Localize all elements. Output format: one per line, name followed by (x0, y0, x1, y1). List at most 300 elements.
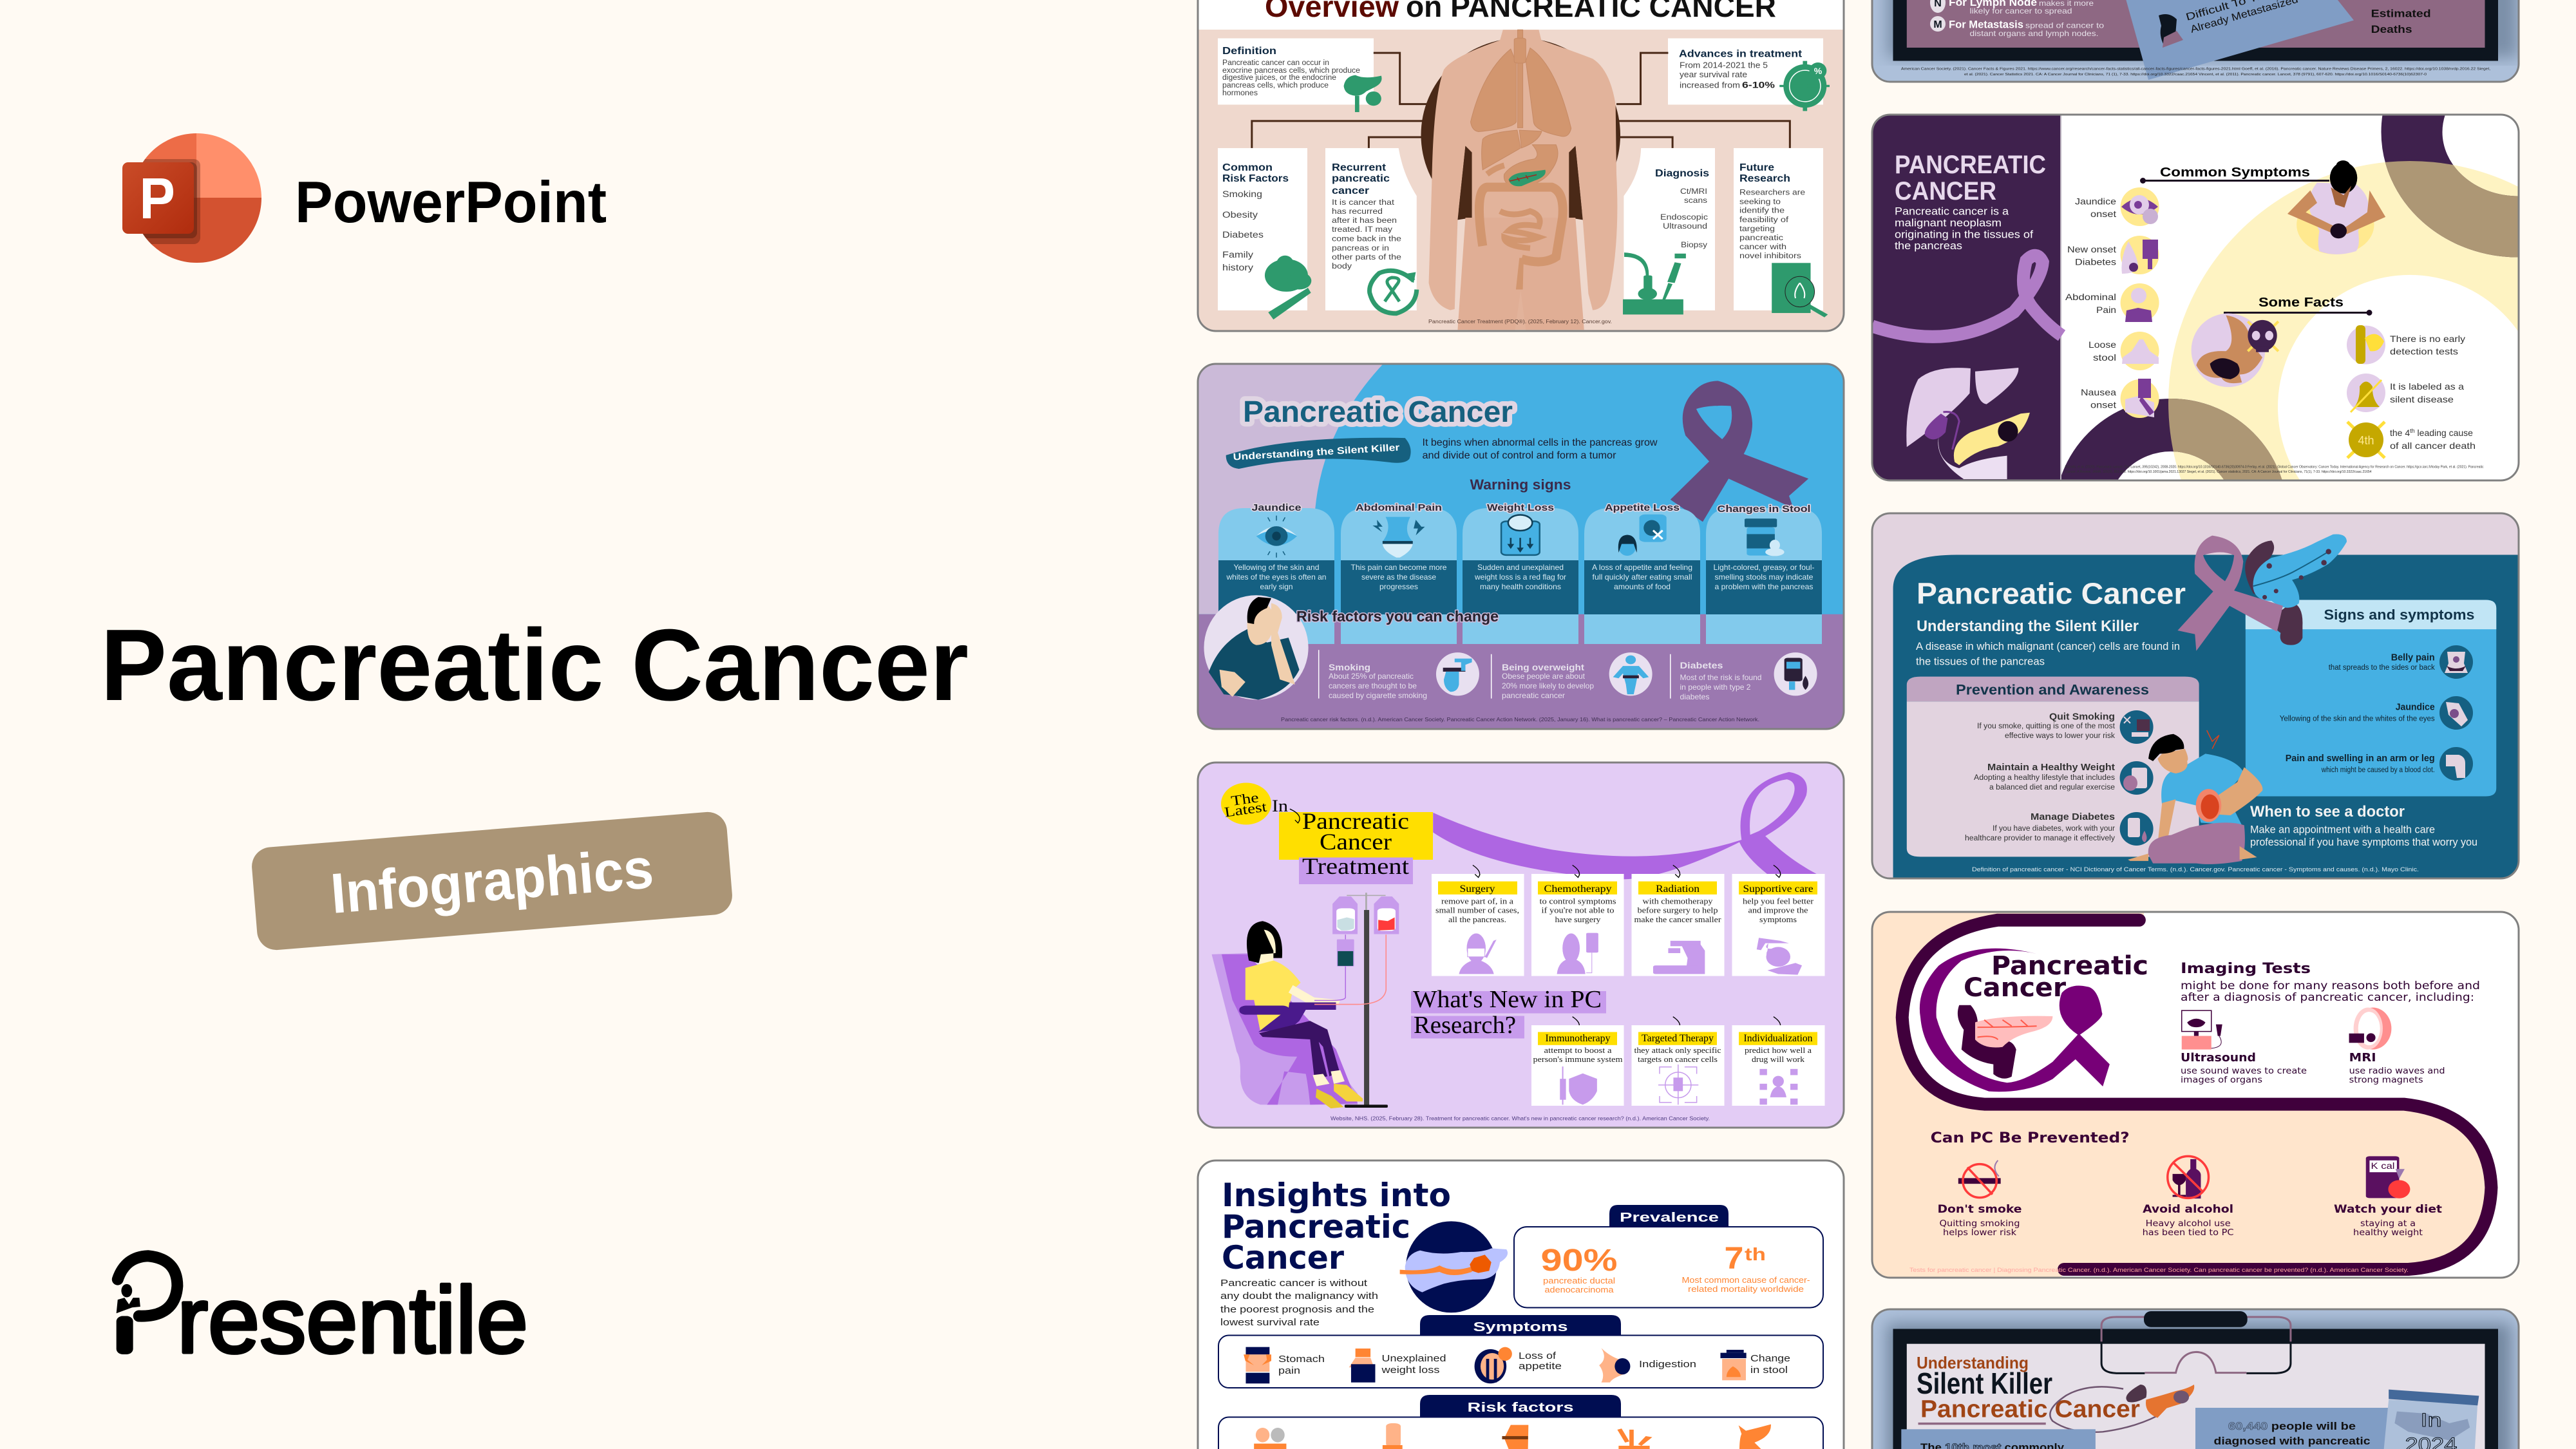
main title: Pancreatic Cancer (100, 609, 969, 722)
prevention labels: healthcare provider to manage it effectively (1965, 835, 2115, 842)
risk factor text: cancers are thought to be (1329, 681, 1417, 690)
symptom labels (2065, 196, 2116, 410)
sign labels: Jaundice (2396, 702, 2435, 713)
risk factor text: About 25% of pancreatic (1329, 672, 1414, 681)
ribbon border (1902, 920, 2491, 1269)
text block: recurrent pancreatic cancer (1332, 162, 1401, 270)
research headings: Individualization (1744, 1033, 1812, 1044)
text block: common risk factors: Smoking (1222, 189, 1262, 199)
badge: The Latest In: In (1272, 797, 1288, 815)
text block: recurrent pancreatic cancer: treated. IT may (1332, 225, 1393, 234)
prevention labels: If you smoke, quitting is one of the most (1977, 723, 2116, 730)
symptom icons (2121, 187, 2159, 418)
text block: advances in treatment: year survival rate (1680, 70, 1747, 79)
treatment descriptions: help you feel better (1743, 896, 1814, 905)
text block: diagnosis: Biopsy (1681, 240, 1708, 249)
text block: definition: pancreas cells, which produce (1222, 82, 1329, 90)
estimated deaths label: Estimated (2371, 8, 2431, 20)
intro text (1422, 437, 1658, 461)
title: Pancreatic Cancer (1916, 577, 2186, 668)
panel: clipboard staging (cropped at top) (1872, 0, 2519, 82)
intro text: the poorest prognosis and the (1220, 1305, 1374, 1315)
symptom labels: Change (1750, 1353, 1790, 1364)
icon: research magnifier (1772, 263, 1828, 317)
text block: ultrasound and MRI: use radio waves and (2349, 1066, 2445, 1076)
text block: future research: feasibility of (1739, 215, 1789, 224)
research descriptions: drug will work (1752, 1054, 1805, 1064)
treatment descriptions: and improve the (1748, 905, 1808, 915)
card text: whites of the eyes is often an (1226, 573, 1327, 582)
text block: recurrent pancreatic cancer: after it has been (1332, 216, 1397, 225)
card heads: Changes in Stool (1717, 504, 1811, 515)
card text: many health conditions (1480, 582, 1561, 591)
text block: definition: Pancreatic cancer can occur in (1222, 59, 1329, 67)
card text: progresses (1379, 582, 1418, 591)
symptom labels (1278, 1350, 1790, 1376)
stat: 7th (1682, 1242, 1810, 1294)
title: Overview on Pancreatic Cancer (1266, 0, 1776, 17)
text block: common risk factors: Common (1222, 162, 1273, 173)
icon: cigarette and smoke (1265, 256, 1311, 319)
research descriptions: predict how well a (1745, 1045, 1812, 1055)
symptom labels: Abdominal (2065, 292, 2116, 302)
title: Pancreatic Cancer Treatment: Pancreatic (1302, 808, 1409, 834)
text block: when to see a doctor: professional if you have symptoms that worry you (2250, 837, 2477, 848)
illustration: ribbon and pancreas (1920, 949, 2110, 1092)
stat: 7th: 7 (1725, 1242, 1744, 1276)
treatment headings: Chemotherapy (1544, 884, 1611, 895)
treatment cards (1290, 809, 1825, 1029)
panel: Latest in Pancreatic Cancer Treatment (1198, 762, 1844, 1128)
fact text: It is labeled as a (2390, 381, 2464, 392)
symptom labels: weight loss (1381, 1365, 1440, 1376)
treatment descriptions: make the cancer smaller (1634, 914, 1721, 924)
risk factor text: 20% more likely to develop (1502, 681, 1594, 690)
white info boxes (1218, 39, 1823, 310)
risk factor icons (1254, 1423, 1771, 1449)
text block: recurrent pancreatic cancer: pancreas or in (1332, 243, 1389, 252)
text block: common risk factors (1222, 162, 1289, 272)
title: Insights into Pancreatic Cancer: Pancreatic (1222, 1208, 1410, 1245)
card text: This pain can become more (1351, 563, 1447, 572)
treatment descriptions: symptoms (1759, 914, 1797, 924)
prevention icons (2120, 710, 2154, 846)
title: Pancreatic Cancer: Understanding the Silent Killer (1917, 618, 2139, 635)
illustration: stomach with skull (2192, 314, 2278, 387)
symptom labels: in stool (1750, 1365, 1788, 1376)
stat: 7th: th (1745, 1244, 1766, 1264)
symptom labels: Unexplained (1382, 1353, 1446, 1364)
prevention labels: If you have diabetes, work with your (1993, 825, 2115, 833)
title: Pancreatic Cancer: A disease in which malignant (cancer) cells are found in (1916, 641, 2180, 652)
fact text: th (2410, 428, 2415, 434)
symptom labels: New onset (2067, 244, 2116, 254)
title: Pancreatic Cancer: Cancer (1964, 973, 2066, 1003)
sidebar title (1895, 151, 2046, 205)
icon: recurrence ribbon (1370, 270, 1417, 314)
sidebar (1872, 115, 2062, 480)
card text: a problem with the pancreas (1714, 582, 1814, 591)
text block: diagnosis: Endoscopic (1660, 213, 1708, 222)
staging text: For Metastasis (1949, 19, 2023, 31)
treatment descriptions: have surgery (1555, 914, 1601, 924)
clipboard clip (2101, 1311, 2291, 1373)
heading: Risk factors you can change: Risk factors you can change (1296, 608, 1499, 625)
prevalence block (1514, 1205, 1823, 1307)
text block: advances in treatment: 6-10% (1742, 80, 1776, 90)
illustration: liver and pancreas (1906, 368, 2030, 479)
icon: no smoking (1958, 1160, 2001, 1198)
text block: ultrasound and MRI: Ultrasound (2181, 1051, 2256, 1065)
heading: What's New in PC Research? (1411, 986, 1606, 1039)
icon: eye (1256, 516, 1297, 558)
title: Insights into Pancreatic Cancer: Insights into (1222, 1177, 1451, 1214)
icon: ultrasound and biopsy (1623, 252, 1686, 314)
background shapes (1197, 364, 1844, 732)
note card: 60,440 people: diagnosed with pancreatic (2214, 1435, 2370, 1447)
treatment descriptions: if you're not able to (1542, 905, 1614, 915)
prevention labels: Watch your diet (2334, 1203, 2442, 1216)
icon: weighing scale (1501, 515, 1540, 555)
prevention labels: healthy weight (2353, 1227, 2423, 1238)
note card: 60,440 people: 60,440 people will be (2228, 1420, 2356, 1432)
text block: future research: targeting (1739, 224, 1775, 233)
symptom labels: Loss of (1519, 1350, 1557, 1361)
text block: ultrasound and MRI: images of organs (2181, 1075, 2262, 1085)
prevention labels: effective ways to lower your risk (2005, 732, 2115, 740)
panel: Understanding the Silent Killer, prevention and signs (1872, 513, 2520, 880)
background rings (2081, 37, 2576, 644)
text block: recurrent pancreatic cancer: body (1332, 261, 1352, 270)
sidebar text: Pancreatic cancer is a (1895, 205, 2009, 218)
treatment descriptions: remove part of, in a (1441, 896, 1513, 905)
symptom labels: Jaundice (2075, 196, 2116, 206)
prevention and awareness box (1907, 677, 2199, 857)
treatment headings (1459, 884, 1814, 895)
illustration: ribbon and pancreas (2177, 535, 2347, 651)
note card: difficult to treat (2125, 0, 2354, 80)
card text: Light-colored, greasy, or foul- (1713, 563, 1815, 572)
symptom labels: pain (1278, 1365, 1300, 1376)
staging text: likely for cancer to spread (1969, 6, 2072, 15)
treatment headings: Supportive care (1743, 884, 1814, 895)
panel: Insights into Pancreatic Cancer (1198, 1160, 1844, 1449)
research descriptions (1533, 1045, 1812, 1064)
risk factor text: Most of the risk is found (1680, 673, 1762, 682)
research descriptions: attempt to boost a (1544, 1045, 1612, 1055)
fact text: of all cancer death (2390, 440, 2476, 451)
symptom labels: Loose (2088, 339, 2116, 350)
research headings: Immunotherapy (1546, 1033, 1610, 1044)
risk factor text: Being overweight (1502, 662, 1584, 672)
text block: advances in treatment (1679, 49, 1803, 90)
prevention labels: Maintain a Healthy Weight (1987, 762, 2115, 773)
ribbon swoosh (1433, 772, 1817, 879)
panel: Common Symptoms and Some Facts (1872, 37, 2576, 644)
card text: A loss of appetite and feeling (1592, 563, 1692, 572)
title: Pancreatic Cancer: the tissues of the pancreas (1916, 656, 2045, 668)
panel: Overview on Pancreatic Cancer: % (1814, 66, 1823, 76)
treatment descriptions: before surgery to help (1637, 905, 1718, 915)
icon: abdominal pain (1372, 517, 1425, 558)
risk factor text (1329, 660, 1762, 701)
tag: Infographics (251, 811, 734, 951)
citation (2065, 466, 2484, 474)
fact text: There is no early (2390, 334, 2465, 344)
text block: recurrent pancreatic cancer: Recurrent (1332, 162, 1386, 173)
card text: weight loss is a red flag for (1474, 573, 1566, 582)
staging text: M (1933, 19, 1942, 30)
fact icons (2347, 325, 2385, 458)
treatment headings: Surgery (1459, 884, 1495, 895)
text block: recurrent pancreatic cancer: cancer (1332, 185, 1369, 196)
risk factor text: in people with type 2 (1680, 683, 1751, 692)
calendar: In 2024 (2383, 1390, 2479, 1449)
illustration: man holding his head (1204, 595, 1309, 700)
panel: Understanding Silent Killer Pancreatic Cancer clipboard (1872, 1309, 2519, 1449)
fact text (2390, 334, 2476, 451)
text block: definition: exocrine pancreas cells, which produce (1222, 67, 1360, 75)
icon: ultrasound (2182, 1010, 2222, 1050)
panel: Imaging Tests and Prevention (1870, 911, 2519, 1279)
citation: Cancer: A Review. JAMA, 326(9), 851-862. https://doi.org/10.1001/jama.2021.13027 Siegel, et al. (2021). Cancer statistics, 2021. CA: A Cancer Journal for Clinicians, 71(1), 7-33. https://doi.org/10.3322/caac.21654 (2065, 470, 2372, 474)
treatment descriptions: with chemotherapy (1642, 896, 1713, 905)
treatment descriptions: all the pancreas. (1448, 914, 1506, 924)
fact text: silent disease (2390, 394, 2454, 404)
title: Pancreatic Cancer: Pancreatic Cancer (1917, 577, 2186, 611)
tag: Infographics: Infographics (328, 836, 656, 925)
text block: ultrasound and MRI: MRI (2349, 1051, 2376, 1065)
card text: full quickly after eating small (1592, 573, 1692, 582)
icon: awareness ribbon (1671, 381, 1808, 522)
risk factor text: Smoking (1329, 662, 1370, 672)
symptom labels: Diabetes (2075, 256, 2116, 267)
research cards (1531, 1025, 1825, 1106)
estimated deaths label (2371, 8, 2431, 35)
text block: diagnosis: Ultrasound (1663, 222, 1707, 231)
icon: appetite loss (1618, 515, 1667, 556)
treatment descriptions: small number of cases, (1435, 905, 1519, 915)
text block: future research: pancreatic (1739, 233, 1783, 242)
risk factors block (1218, 1395, 1823, 1449)
illustration: pancreas with tumour (1400, 1221, 1508, 1312)
sign labels: which might be caused by a blood clot. (2321, 766, 2435, 774)
prevention labels: Avoid alcohol (2143, 1203, 2233, 1216)
text block: diagnosis: Ct/MRI (1680, 187, 1707, 196)
text block: future research: seeking to (1739, 197, 1781, 206)
citation: Tests for pancreatic cancer | Diagnosing Pancreatic Cancer. (n.d.). American Cancer Society. Can pancreatic cancer be prevented? (n.d.). American Cancer Society. (1909, 1267, 2409, 1273)
banner: Understanding the Silent Killer (1226, 438, 1411, 469)
sign labels (2280, 652, 2435, 774)
intro text: and divide out of control and form a tumor (1422, 450, 1616, 461)
symptom labels: onset (2090, 399, 2116, 410)
risk factor text: diabetes (1680, 692, 1709, 701)
card text: amounts of food (1614, 582, 1671, 591)
citation: Website, NHS. (2025, February 28). Treatment for pancreatic cancer. What's new in pancreatic cancer research? (n.d.). American Cancer Society. (1331, 1115, 1710, 1122)
prevention labels: Quit Smoking (2049, 711, 2115, 723)
intro text: Pancreatic cancer is without (1220, 1278, 1367, 1289)
prevention labels: Adopting a healthy lifestyle that includes (1974, 774, 2115, 782)
text block: ultrasound and MRI: use sound waves to create (2181, 1066, 2307, 1076)
icon: calorie calculator and apple (2366, 1156, 2410, 1198)
icon: PowerPoint logo (122, 133, 262, 263)
prevention labels (1965, 711, 2116, 842)
prevention labels: has been tied to PC (2143, 1227, 2234, 1238)
title: Pancreatic Cancer Treatment: Treatment (1302, 853, 1409, 879)
title: Insights into Pancreatic Cancer (1222, 1177, 1451, 1276)
prevalence block: Prevalence (1620, 1211, 1719, 1225)
logo: Presentile: resentile (177, 1267, 528, 1372)
text block: recurrent pancreatic cancer: come back in the (1332, 234, 1401, 243)
text block: imaging tests: after a diagnosis of pancreatic cancer, including: (2181, 991, 2474, 1004)
icon: no alcohol (2168, 1156, 2208, 1198)
sidebar text: the pancreas (1895, 240, 1962, 252)
icon: pancreas (1344, 75, 1382, 112)
calendar: In 2024: In (2420, 1410, 2442, 1431)
treatment descriptions: to control symptoms (1539, 896, 1616, 905)
icon: MRI (2349, 1008, 2391, 1050)
text block: when to see a doctor: Make an appointment with a health care (2250, 824, 2435, 836)
text block: future research: cancer with (1739, 242, 1786, 251)
title: Pancreatic Cancer (1964, 951, 2148, 1003)
text block: when to see a doctor (2250, 803, 2477, 848)
note card: 10th most common (1901, 1429, 2096, 1449)
signs and symptoms box (2246, 600, 2496, 797)
title: Understanding Silent Killer Pancreatic Cancer: Silent Killer (1917, 1367, 2052, 1400)
text block: common risk factors: Risk Factors (1222, 173, 1289, 184)
treatment headings: Radiation (1656, 884, 1700, 895)
risk factor text: caused by cigarette smoking (1329, 691, 1427, 700)
citation (1901, 68, 2491, 77)
text block: definition: Definition (1222, 46, 1276, 57)
badge: The Latest In (1221, 783, 1288, 824)
card heads: Appetite Loss (1605, 502, 1680, 513)
text block: advances in treatment: Advances in treatment (1679, 49, 1803, 59)
warning sign cards (1218, 502, 1822, 644)
text block: diagnosis: Diagnosis (1655, 168, 1709, 179)
symptom icons (1244, 1347, 1747, 1383)
text block: ultrasound and MRI (2181, 1051, 2445, 1085)
panel: Overview on Pancreatic Cancer (1198, 0, 1844, 331)
heading: Some Facts (2224, 296, 2372, 316)
card heads (1252, 502, 1811, 515)
prevention and awareness box: Prevention and Awareness (1956, 681, 2149, 698)
illustration: pancreas with loop underline (1918, 1385, 2194, 1432)
prevention labels: helps lower risk (1943, 1227, 2016, 1238)
prevention labels: a balanced diet and regular exercise (1989, 784, 2115, 791)
research descriptions: person's immune system (1533, 1054, 1623, 1064)
risk factors block: Risk factors (1467, 1401, 1574, 1415)
peach background (1870, 911, 2493, 1279)
citation: American Cancer Society. (2021). Cancer Facts & Figures 2021. https://www.cancer.org/research/cancer-facts-statistics/all-cancer-facts-figures/cancer-facts-figures-2021.html Goeff, et al. (2016). Pancreatic cancer. Nature Reviews Disease Primers, 2, 16022. https://doi.org/10.1038/nrdp.2016.22 Siegel, (1901, 68, 2491, 71)
card text: Sudden and unexplained (1477, 563, 1564, 572)
citation: Pancreatic Cancer Treatment (PDQ®). (2025, February 12). Cancer.gov. (1428, 319, 1612, 325)
text block: recurrent pancreatic cancer: other parts of the (1332, 252, 1401, 261)
text block: recurrent pancreatic cancer: has recurred (1332, 207, 1383, 216)
text block: definition (1222, 46, 1360, 97)
symptoms block (1218, 1315, 1823, 1388)
banner: Understanding the Silent Killer: Understanding the Silent Killer (1233, 442, 1400, 462)
blue background (1893, 555, 2520, 880)
note card: 60,440 people (2195, 1408, 2389, 1449)
heading: Common Symptoms: Common Symptoms (2160, 166, 2310, 180)
text block: recurrent pancreatic cancer: pancreatic (1332, 173, 1390, 184)
text block: definition: digestive juices, or the endocrine (1222, 74, 1336, 82)
signs and symptoms box: Signs and symptoms (2324, 607, 2474, 623)
treatment icons (1459, 933, 1802, 975)
text block: future research (1739, 162, 1805, 260)
card text (1226, 563, 1815, 591)
text block: future research: Future (1739, 162, 1774, 173)
intro text: lowest survival rate (1220, 1318, 1320, 1328)
citation: et al. (2021). Cancer Statistics 2021. CA: A Cancer Journal for Clinicians, 71 (1), 7-33. https://doi.org/10.3322/caac.21654 Vincent, et al. (2011). Pancreatic cancer. Lancet, 378 (9791), 607-620. https://doi.org/10.1016/S0140-6736(10)62307-0 (1964, 73, 2427, 77)
intro text: any doubt the malignancy with (1220, 1291, 1378, 1302)
heading: Warning signs: Warning signs (1470, 477, 1571, 493)
risk factor text: Diabetes (1680, 660, 1723, 670)
badge: The Latest In: The (1230, 789, 1260, 809)
sign labels: that spreads to the sides or back (2329, 664, 2435, 672)
prevention labels: Quitting smoking (1940, 1218, 2020, 1229)
symptom labels: appetite (1519, 1361, 1562, 1372)
citation: Pancreatic cancer risk factors. (n.d.). American Cancer Society. Pancreatic Cancer Action Network. (2025, January 16). What is pancreatic cancer? – Pancreatic Cancer Action Network. (1281, 716, 1759, 723)
research headings (1546, 1033, 1812, 1044)
citation: Mizrahi, et al. (2020). Pancreatic cancer. The Lancet, 395(10242), 2008-2020. https://doi.org/10.1016/S0140-6736(20)30974-0 Ferlay, et al. (2021). Global Cancer Observatory: Cancer Today. International Agency for Research on Cancer. https://gco.iarc.fr/today Park, et al. (2021). Pancreatic (2065, 466, 2484, 469)
card heads: Weight Loss (1487, 502, 1554, 513)
card heads: Jaundice (1252, 502, 1301, 513)
sidebar title: PANCREATIC (1895, 151, 2046, 179)
staging text: spread of cancer to (2025, 21, 2104, 30)
text block: common risk factors: Diabetes (1222, 230, 1264, 240)
estimated deaths label: Deaths (2371, 24, 2412, 35)
text block: advances in treatment: increased from (1680, 80, 1740, 90)
fact icons: 4th (2358, 434, 2374, 447)
heading: Some Facts: Some Facts (2259, 296, 2344, 310)
stat: 90%: adenocarcinoma (1544, 1285, 1614, 1294)
symptom labels: stool (2093, 352, 2116, 363)
title: Understanding Silent Killer Pancreatic Cancer: Pancreatic Cancer (1920, 1396, 2140, 1423)
fact text: the 4 (2390, 428, 2410, 438)
text block: future research: Research (1739, 173, 1790, 184)
text block: when to see a doctor: When to see a doctor (2250, 803, 2405, 820)
sign icons (2439, 645, 2473, 781)
research descriptions: they attack only specific (1634, 1045, 1721, 1055)
title: Pancreatic Cancer: Pancreatic (1991, 951, 2148, 981)
symptom labels: Nausea (2081, 387, 2116, 397)
prevention labels (1937, 1203, 2442, 1238)
sidebar text: originating in the tissues of (1895, 228, 2033, 241)
arrows to treatment cards (1290, 809, 1781, 1029)
text block: ultrasound and MRI: strong magnets (2349, 1075, 2423, 1085)
staging text: distant organs and lymph nodes. (1969, 29, 2098, 38)
text block: common risk factors: Family (1222, 250, 1253, 260)
title: Pancreatic Cancer Treatment: Cancer (1320, 829, 1392, 855)
sign labels: Pain and swelling in an arm or leg (2286, 753, 2435, 764)
prevention labels: Manage Diabetes (2031, 811, 2115, 822)
text block: imaging tests: might be done for many reasons both before and (2181, 980, 2480, 992)
citation: Definition of pancreatic cancer - NCI Dictionary of Cancer Terms. (n.d.). Cancer.gov. Pancreatic cancer - Symptoms and causes. (n.d.). Mayo Clinic. (1972, 866, 2419, 873)
research headings: Targeted Therapy (1642, 1033, 1714, 1044)
badge: The Latest In: Latest (1224, 799, 1267, 820)
title: Understanding Silent Killer Pancreatic Cancer (1917, 1353, 2140, 1423)
card text: smelling stools may indicate (1714, 573, 1814, 582)
stat: 90% (1540, 1244, 1618, 1294)
text block: imaging tests (2181, 961, 2480, 1004)
research icons (1560, 1065, 1797, 1104)
symptom labels: Pain (2096, 305, 2116, 315)
stat: 90%: 90% (1540, 1244, 1618, 1278)
heading: What's New in PC Research?: Research? (1414, 1012, 1516, 1039)
card text: early sign (1260, 582, 1293, 591)
